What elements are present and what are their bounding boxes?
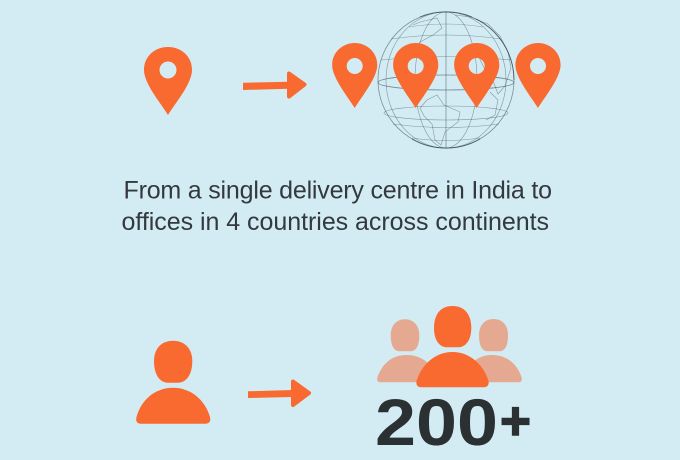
north america outline: [405, 18, 442, 72]
location pin 4: [515, 43, 561, 108]
location pin 3: [454, 43, 499, 108]
icon: single person: [136, 341, 210, 424]
location pin 1: [332, 43, 377, 108]
south america outline: [420, 95, 460, 145]
location pin 2: [393, 43, 438, 108]
headline number: 200: [375, 385, 498, 459]
headline number: +: [500, 391, 531, 451]
icon: wireframe globe: [378, 12, 514, 148]
caption text: From a single delivery centre in India to: [124, 177, 552, 205]
caption text: [122, 177, 552, 236]
arrow: one location to many: [243, 74, 304, 96]
centre person: [416, 306, 489, 387]
right person: [460, 319, 522, 382]
icon: single location pin: [144, 47, 192, 115]
arrow: one person to many: [248, 382, 309, 405]
left person: [377, 319, 440, 382]
icon: group of people: [377, 306, 522, 387]
caption text: offices in 4 countries across continents: [122, 208, 549, 236]
eurasia and africa outline: [455, 15, 511, 120]
